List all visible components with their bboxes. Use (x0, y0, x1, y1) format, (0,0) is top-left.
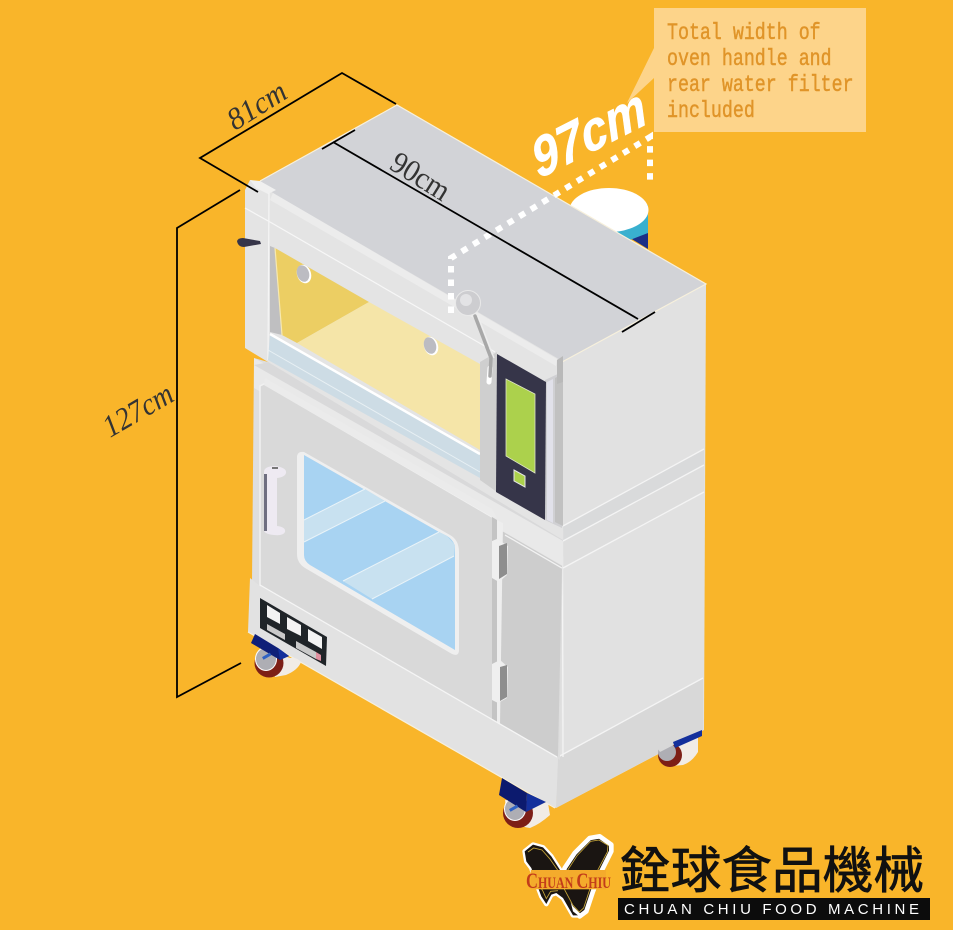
dimension: 90cm: 90cm (384, 144, 457, 208)
panel: oven front fascia (245, 180, 563, 540)
callout: total width note: rear water filter (667, 73, 854, 99)
dimension: 81cm (200, 73, 396, 192)
panel: lower cabinet front (252, 358, 563, 760)
oven glass ledge (268, 335, 480, 478)
dimension: 97cm dotted measure (451, 137, 650, 313)
caster: left (251, 634, 301, 678)
icon: oven door handle lever (456, 290, 494, 382)
company name: English bar: CHUAN CHIU FOOD MACHINE (624, 901, 919, 918)
right side face (556, 284, 706, 808)
dimension: 127cm: 127cm (96, 376, 179, 444)
icon: rear water filter (570, 188, 648, 249)
panel: proofer door (260, 378, 503, 725)
door handle (264, 466, 286, 535)
label: 97cm: 97cm (525, 75, 653, 191)
control panel display (496, 354, 546, 520)
callout: total width note (627, 8, 866, 132)
control panel (260, 598, 327, 666)
window (297, 452, 459, 655)
oven window floor (297, 302, 480, 450)
caster: front (499, 778, 550, 828)
icon: side latch (237, 238, 261, 247)
company name: Chinese: 銓球食品機械 (620, 843, 924, 899)
dimension: 90cm (322, 130, 655, 332)
dimension: 127cm (96, 190, 241, 697)
control column (480, 352, 497, 492)
callout: total width note: Total width of (667, 21, 821, 47)
callout: total width note: included (667, 99, 755, 125)
dimension: 81cm: 81cm (220, 73, 293, 137)
panel: oven top (260, 105, 706, 362)
callout: total width note: oven handle and (667, 47, 832, 73)
icon: butterfly emblem (525, 836, 611, 916)
oven lights (294, 263, 314, 285)
panel: base plinth (248, 578, 558, 808)
oven and proofer machine (237, 105, 706, 828)
caster: right rear (655, 722, 703, 767)
oven window rear wall (275, 248, 369, 343)
logo: Chuan Chiu (525, 836, 930, 920)
hinges (492, 539, 508, 703)
logo wordmark: Chuan Chiu: CHUAN CHIU (526, 868, 611, 893)
